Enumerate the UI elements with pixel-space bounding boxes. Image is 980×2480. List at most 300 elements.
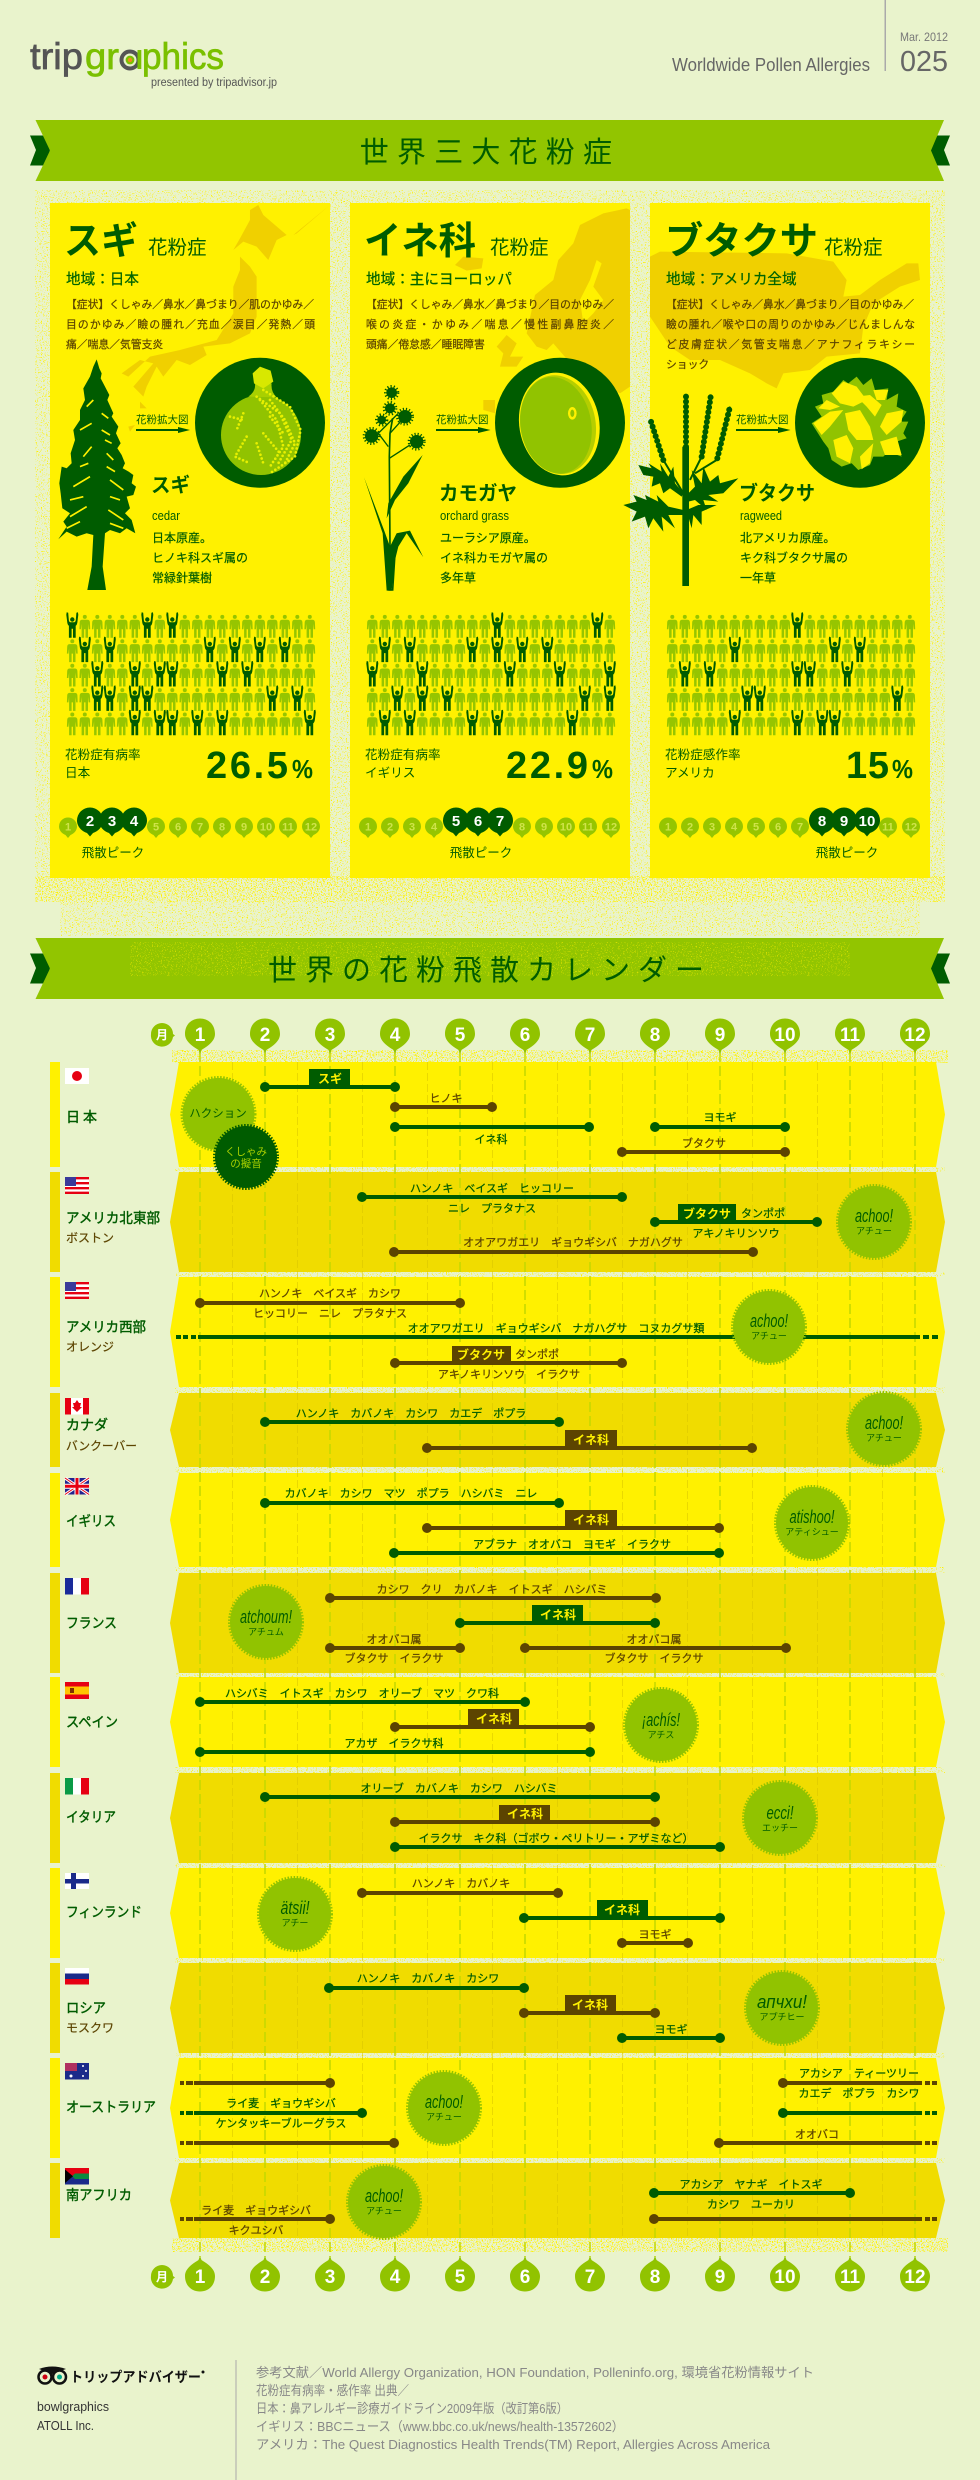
header title and issue number — [672, 0, 948, 78]
month pins: peak 2–4: 5 — [153, 822, 159, 834]
row: 日本 — [65, 1068, 790, 1188]
bar: ハンノキ カバノキ カシワ: ハンノキ カバノキ カシワ — [357, 1972, 499, 1985]
burst: achoo!: アチュー — [366, 2206, 402, 2216]
month axis: top: 7 — [585, 1025, 595, 1046]
bar: カバノキ カシワ マツ ポプラ ハシバミ ニレ — [260, 1487, 564, 1508]
month axis: bottom — [151, 2256, 930, 2292]
pictogram: 15 of 100 people — [667, 612, 915, 735]
arrow: 花粉拡大図 — [136, 413, 190, 433]
stat: 26.5%: % — [292, 754, 313, 784]
month pins: peak 5–7: 6 — [474, 813, 482, 830]
burst: achoo!: achoo! — [750, 1311, 788, 1331]
bar: アカシア ティーツリー — [778, 2067, 937, 2088]
bar: アカザ イラクサ科 — [195, 1736, 595, 1757]
month axis: bottom: 4 — [390, 2267, 401, 2288]
month pins: peak 8–10 — [659, 808, 920, 860]
month pins: peak 5–7: 5 — [452, 813, 460, 830]
month axis: bottom: 5 — [455, 2267, 466, 2288]
header logo: presented by tripadvisor.jp — [151, 77, 277, 89]
icon: ragweed pollen circle — [795, 358, 925, 488]
row: オーストラリア: オーストラリア — [66, 2099, 156, 2115]
arrow: 花粉拡大図: 花粉拡大図 — [436, 413, 488, 426]
stat: 26.5%: 26.5 — [206, 745, 288, 787]
burst: atchoum!: アチュム — [248, 1627, 284, 1637]
description: ヒノキ科スギ属の — [152, 551, 248, 565]
bar: イネ科: イネ科 — [540, 1607, 576, 1622]
map: USA — [650, 252, 920, 388]
banner: 世界の花粉飛散カレンダー: 世界の花粉飛散カレンダー — [268, 954, 712, 987]
description: 北アメリカ原産。 — [740, 531, 835, 545]
footer references — [236, 2360, 814, 2480]
bar: イネ科: イネ科 — [507, 1806, 543, 1821]
symptoms — [666, 297, 915, 371]
description: 多年草 — [440, 571, 476, 585]
month pins: peak 5–7: 8 — [519, 822, 525, 834]
month axis: bottom: 7 — [585, 2267, 595, 2288]
bar: ハンノキ ベイスギ カシワ ヒッコリー ニレ プラタナス: ハンノキ ベイスギ カシワ — [259, 1287, 401, 1300]
header title and issue number: Mar. 2012 — [900, 30, 948, 44]
symptoms: 喉の炎症・かゆみ／喘息／慢性副鼻腔炎／ — [366, 317, 614, 331]
month pins: peak 8–10: 5 — [753, 822, 759, 834]
burst: achoo!: achoo! — [425, 2092, 463, 2112]
bar: ライ麦 ギョウギシバ ケンタッキーブルーグラス: ライ麦 ギョウギシバ — [226, 2097, 336, 2110]
footer credits: ATOLL Inc. — [37, 2418, 94, 2433]
bar: ヨモギ: ヨモギ — [638, 1928, 672, 1941]
row: 南アフリカ: 南アフリカ — [66, 2187, 132, 2203]
panel: ブタクサ: 地域：アメリカ全域 — [666, 271, 797, 288]
bar: カシワ クリ カバノキ イトスギ ハシバミ — [325, 1583, 661, 1603]
flag: UK — [65, 1478, 89, 1494]
bar: アブラナ オオバコ ヨモギ イラクサ — [389, 1537, 724, 1558]
bar: ライ麦 ギョウギシバ ケンタッキーブルーグラス — [180, 2097, 367, 2130]
row: フランス — [65, 1578, 791, 1665]
month pins: peak 8–10: 6 — [775, 822, 781, 834]
burst: ハクション: ハクション — [189, 1107, 247, 1120]
burst: achoo!: アチュー — [426, 2112, 462, 2122]
month axis: bottom: 8 — [650, 2267, 660, 2288]
burst: achoo! — [348, 2166, 420, 2238]
stat: 26.5%: 花粉症有病率 — [65, 747, 141, 762]
stat: 26.5% — [65, 745, 313, 787]
stat: 22.9%: 22.9 — [506, 745, 588, 787]
row: アメリカ北東部: ボストン — [66, 1231, 114, 1245]
bar: ヨモギ — [617, 2023, 725, 2043]
bar: カバノキ カシワ マツ ポプラ ハシバミ ニレ: カバノキ カシワ マツ ポプラ ハシバミ ニレ — [285, 1487, 537, 1500]
panel: イネ科: 花粉症 — [490, 237, 549, 259]
month pins: peak 5–7: 飛散ピーク — [450, 845, 512, 860]
bar: ブタクサ タンポポ アキノキリンソウ イラクサ: ブタクサ — [457, 1347, 505, 1362]
icon: cedar pollen circle — [195, 358, 325, 488]
month pins: peak 2–4: 7 — [197, 822, 203, 834]
bar: オオバコ属 ブタクサ イラクサ (summer): ブタクサ イラクサ — [604, 1651, 704, 1665]
description: 一年草 — [740, 571, 776, 585]
bar: brown to year end — [649, 2214, 937, 2224]
month pins: peak 8–10: 7 — [797, 822, 803, 834]
bar: イネ科: イネ科 — [474, 1132, 508, 1146]
bar: アカシア ヤナギ イトスギ: カシワ ユーカリ — [707, 2198, 795, 2211]
burst: くしゃみの擬音: くしゃみ — [225, 1146, 267, 1158]
stat: 22.9%: イギリス — [365, 766, 415, 780]
description: ユーラシア原産。 — [440, 531, 536, 545]
flag: Australia — [65, 2063, 89, 2080]
month pins: peak 5–7: 4 — [431, 822, 438, 834]
month axis: top: 12 — [904, 1025, 926, 1046]
footer references: アメリカ：The Quest Diagnostics Health Trends(TM) Report, Allergies Across America — [256, 2437, 771, 2452]
bar: ハンノキ ベイスギ カシワ ヒッコリー ニレ プラタナス — [195, 1287, 465, 1320]
bar: アブラナ オオバコ ヨモギ イラクサ: アブラナ オオバコ ヨモギ イラクサ — [473, 1537, 671, 1551]
panel: ブタクサ — [623, 203, 930, 878]
bar: ライ麦 ギョウギシバ ケンタッキーブルーグラス: ケンタッキーブルーグラス — [216, 2116, 346, 2130]
month axis: top: 10 — [774, 1025, 796, 1046]
symptoms: ショック — [666, 358, 709, 371]
banner: 世界の花粉飛散カレンダー — [30, 938, 950, 999]
arrow: 花粉拡大図: 花粉拡大図 — [736, 413, 788, 426]
bar: カエデ ポプラ カシワ — [778, 2086, 937, 2118]
burst: achoo!: achoo! — [365, 2186, 403, 2206]
bar: ライ麦 ギョウギシバ キクユシバ: キクユシバ — [229, 2224, 283, 2237]
month axis: top: 6 — [520, 1025, 530, 1046]
bar: イネ科 — [519, 1900, 725, 1923]
month pins: peak 5–7: 12 — [605, 822, 617, 834]
row: 日本: 日本 — [66, 1109, 100, 1125]
bar: オオバコ属 ブタクサ イラクサ (spring): ブタクサ イラクサ — [344, 1651, 444, 1665]
bar: ヨモギ — [617, 1928, 693, 1948]
burst: くしゃみの擬音 — [215, 1126, 277, 1188]
footer references: イギリス：BBCニュース（www.bbc.co.uk/news/health-13572602） — [256, 2419, 624, 2434]
month pins: peak 5–7: 2 — [387, 822, 393, 834]
row: カナダ — [65, 1393, 920, 1465]
burst: ¡achís! — [625, 1689, 697, 1761]
symptoms: ど皮膚症状／気管支喘息／アナフィラキシー — [666, 337, 915, 351]
bar: ハシバミ イトスギ カシワ オリーブ マツ クワ科: ハシバミ イトスギ カシワ オリーブ マツ クワ科 — [225, 1686, 499, 1700]
bar: ヒノキ: ヒノキ — [430, 1092, 462, 1105]
month axis: bottom: 1 — [195, 2267, 206, 2288]
month axis: bottom: 9 — [715, 2267, 725, 2288]
description — [440, 531, 548, 585]
bar: オオバコ: オオバコ — [795, 2128, 839, 2141]
month pins: peak 8–10: 9 — [840, 813, 848, 830]
bar: ハンノキ ベイスギ ヒッコリー ニレ プラタナス: ニレ プラタナス — [448, 1202, 536, 1215]
bar: アカザ イラクサ科: アカザ イラクサ科 — [344, 1736, 444, 1750]
bar: ブタクサ タンポポ アキノキリンソウ: アキノキリンソウ — [692, 1227, 780, 1240]
row: イタリア: イタリア — [66, 1809, 116, 1825]
bar: イネ科: イネ科 — [573, 1512, 609, 1527]
footer credits: bowlgraphics — [37, 2399, 109, 2414]
footer references: 花粉症有病率・感作率 出典／ — [256, 2383, 409, 2398]
bar: カシワ クリ カバノキ イトスギ ハシバミ: カシワ クリ カバノキ イトスギ ハシバミ — [377, 1583, 607, 1596]
flag: USA — [65, 1282, 89, 1299]
burst: atishoo!: アティシュー — [785, 1527, 839, 1537]
bar: ライ麦 ギョウギシバ キクユシバ — [180, 2204, 335, 2237]
row: アメリカ北東部 — [65, 1177, 910, 1258]
bar: オオバコ属 ブタクサ イラクサ (spring) — [325, 1633, 465, 1665]
month axis: top: 月 — [156, 1028, 168, 1042]
burst: achoo!: アチュー — [751, 1331, 787, 1341]
stat: 15%: 花粉症感作率 — [665, 747, 741, 762]
symptoms: 頭痛／倦怠感／睡眠障害 — [366, 337, 485, 351]
row: アメリカ西部: オレンジ — [66, 1340, 114, 1354]
month axis: bottom: 12 — [904, 2267, 926, 2288]
row: ロシア: ロシア — [66, 2000, 106, 2016]
month axis: bottom: 6 — [520, 2267, 530, 2288]
bar: イネ科: イネ科 — [476, 1711, 512, 1726]
flag: Russia — [65, 1968, 89, 1984]
panel: ブタクサ: ブタクサ — [665, 220, 818, 263]
icon: orchard grass — [364, 387, 423, 591]
pictogram: 26.5 of 100 people — [66, 612, 316, 735]
bar: イネ科 — [390, 1805, 660, 1827]
bar: アカシア ティーツリー: アカシア ティーツリー — [799, 2067, 919, 2080]
header title and issue number: 025 — [900, 46, 948, 78]
symptoms: 【症状】くしゃみ／鼻水／鼻づまり／肌のかゆみ／ — [66, 297, 314, 311]
stat: 15%: アメリカ — [665, 766, 715, 780]
row: フィンランド — [65, 1873, 725, 1950]
footer logo: トリップアドバイザー: トリップアドバイザー — [70, 2369, 201, 2385]
banner: 世界三大花粉症 — [30, 120, 950, 181]
symptoms: 【症状】くしゃみ／鼻水／鼻づまり／目のかゆみ／ — [666, 297, 914, 311]
bar: アカシア ヤナギ イトスギ: アカシア ヤナギ イトスギ — [680, 2178, 822, 2191]
bar: イネ科 — [422, 1510, 724, 1533]
icon: ragweed — [623, 395, 738, 586]
month pins: peak 8–10: 飛散ピーク — [816, 845, 878, 860]
month pins: peak 5–7 — [359, 808, 620, 860]
burst: ¡achís!: ¡achís! — [642, 1710, 680, 1730]
arrow: 花粉拡大図 — [436, 413, 490, 433]
month axis: top: 8 — [650, 1025, 660, 1046]
month axis: top: 1 — [195, 1025, 206, 1046]
bar: ブタクサ — [617, 1136, 790, 1157]
row: フィンランド: フィンランド — [66, 1904, 142, 1920]
stat: 26.5%: 日本 — [65, 766, 91, 780]
month pins: peak 5–7: 3 — [409, 822, 415, 834]
panel: ブタクサ: 花粉症 — [824, 237, 883, 259]
symptoms — [366, 297, 614, 351]
bar: ハンノキ カバノキ カシワ カエデ ポプラ: ハンノキ カバノキ カシワ カエデ ポプラ — [296, 1406, 526, 1420]
month axis: top: 3 — [325, 1025, 335, 1046]
month pins: peak 8–10: 1 — [665, 822, 671, 834]
month pins: peak 2–4: 8 — [219, 822, 225, 834]
month axis: top: 9 — [715, 1025, 725, 1046]
bar: ハンノキ ベイスギ カシワ ヒッコリー ニレ プラタナス: ヒッコリー ニレ プラタナス — [253, 1307, 407, 1320]
stat: 15%: 15 — [846, 745, 889, 787]
flag: Japan — [65, 1068, 89, 1084]
month pins: peak 2–4: 2 — [86, 813, 94, 830]
bar: イラクサ キク科: イラクサ キク科（ゴボウ・ペリトリー・アザミなど） — [418, 1831, 694, 1845]
burst: achoo! — [408, 2072, 480, 2144]
bar: ブタクサ: ブタクサ — [682, 1136, 726, 1150]
panel: イネ科 — [350, 203, 630, 878]
bar: オオバコ — [714, 2128, 937, 2148]
burst: atishoo! — [776, 1487, 848, 1559]
symptoms — [66, 297, 315, 351]
bar: ブタクサ タンポポ アキノキリンソウ イラクサ — [390, 1346, 627, 1381]
row: フランス: フランス — [66, 1615, 117, 1631]
bar: イネ科 — [519, 1995, 660, 2018]
stat: 15%: % — [892, 754, 913, 784]
calendar bands — [50, 1062, 945, 2238]
month pins: peak 5–7: 11 — [582, 822, 594, 834]
month axis: top: 4 — [390, 1025, 401, 1046]
burst: achoo! — [733, 1291, 805, 1363]
month pins: peak 5–7: 1 — [365, 822, 371, 834]
bar: スギ — [260, 1069, 400, 1092]
month pins: peak 5–7: 10 — [560, 822, 572, 834]
bar: ハンノキ カバノキ: ハンノキ カバノキ — [412, 1877, 510, 1890]
month pins: peak 2–4: 飛散ピーク — [82, 845, 144, 860]
month pins: peak 2–4: 9 — [241, 822, 247, 834]
month axis: bottom: 3 — [325, 2267, 335, 2288]
bar: ヒノキ — [390, 1092, 497, 1112]
description: 常緑針葉樹 — [152, 570, 212, 585]
month pins: peak 2–4: 11 — [282, 822, 294, 834]
bar: オリーブ カバノキ カシワ ハシバミ: オリーブ カバノキ カシワ ハシバミ — [360, 1781, 558, 1795]
month pins: peak 2–4: 12 — [305, 822, 317, 834]
flag: Italy — [65, 1778, 89, 1794]
burst: くしゃみの擬音: の擬音 — [230, 1157, 262, 1170]
burst: achoo!: アチュー — [866, 1433, 902, 1443]
panel: スギ: スギ — [64, 221, 138, 263]
panel: ブタクサ: ragweed — [740, 508, 782, 523]
month pins: peak 2–4: 10 — [260, 822, 272, 834]
bar: ハンノキ ベイスギ ヒッコリー ニレ プラタナス: ハンノキ ベイスギ ヒッコリー — [410, 1182, 574, 1195]
bar: オオバコ属 ブタクサ イラクサ (summer) — [520, 1633, 791, 1665]
bar: イネ科 — [422, 1430, 757, 1453]
row: スペイン: スペイン — [66, 1714, 118, 1730]
row: イギリス: イギリス — [66, 1513, 116, 1529]
burst: achoo!: アチュー — [856, 1226, 892, 1236]
bar: イネ科: イネ科 — [572, 1997, 608, 2012]
panel: イネ科: カモガヤ — [439, 482, 517, 505]
bar: カエデ ポプラ カシワ: カエデ ポプラ カシワ — [798, 2086, 920, 2100]
stat: 22.9%: % — [592, 754, 613, 784]
panel: スギ: スギ — [151, 474, 190, 497]
burst: atishoo!: atishoo! — [790, 1507, 834, 1527]
bar: イラクサ キク科 — [390, 1831, 725, 1852]
bar: ブタクサ タンポポ アキノキリンソウ: ブタクサ — [683, 1206, 731, 1221]
bar: オリーブ カバノキ カシワ ハシバミ — [260, 1781, 660, 1802]
bar: ブタクサ タンポポ アキノキリンソウ: タンポポ — [741, 1207, 785, 1220]
symptoms: 痛／喘息／気管支炎 — [66, 337, 163, 351]
row: スペイン — [65, 1682, 697, 1761]
panel: イネ科: イネ科 — [364, 221, 476, 263]
bar: イネ科 — [455, 1605, 660, 1628]
burst: апчхи!: アプチヒー — [759, 2012, 805, 2022]
description — [740, 531, 848, 585]
month pins: peak 2–4: 1 — [65, 822, 71, 834]
description — [152, 531, 248, 585]
month pins: peak 5–7: 7 — [496, 813, 504, 830]
bar: オオアワガエリ ギョウギシバ ナガハグサ コヌカグサ類: オオアワガエリ ギョウギシバ ナガハグサ コヌカグサ類 — [408, 1321, 704, 1335]
burst: ecci!: エッチー — [762, 1823, 798, 1833]
panel: イネ科: orchard grass — [440, 508, 509, 523]
panel: イネ科: 地域：主にヨーロッパ — [366, 271, 512, 288]
panel: ブタクサ: ブタクサ — [739, 481, 815, 505]
bar: ハシバミ イトスギ カシワ オリーブ マツ クワ科 — [195, 1686, 530, 1707]
stat: 22.9% — [365, 745, 613, 787]
description: イネ科カモガヤ属の — [440, 551, 548, 565]
bar: ハンノキ ベイスギ ヒッコリー ニレ プラタナス — [357, 1182, 627, 1215]
flag: Canada — [65, 1398, 89, 1414]
symptoms: 【症状】くしゃみ／鼻水／鼻づまり／目のかゆみ／ — [366, 297, 614, 311]
month axis: top: 2 — [260, 1025, 270, 1046]
row: アメリカ西部 — [65, 1282, 938, 1381]
icon: cedar tree — [58, 359, 136, 590]
bar: ブタクサ タンポポ アキノキリンソウ イラクサ: タンポポ — [515, 1348, 559, 1361]
symptoms: 目のかゆみ／瞼の腫れ／充血／涙目／発熱／頭 — [66, 317, 315, 331]
bar: ライ麦 ギョウギシバ キクユシバ: ライ麦 ギョウギシバ — [201, 2204, 311, 2217]
bar: ハンノキ カバノキ カシワ カエデ ポプラ — [260, 1406, 564, 1427]
month pins: peak 8–10: 4 — [731, 822, 738, 834]
map: Europe — [455, 208, 630, 413]
bar: ブタクサ タンポポ アキノキリンソウ イラクサ: アキノキリンソウ イラクサ — [438, 1368, 580, 1381]
panel: スギ: cedar — [152, 508, 181, 523]
month axis: top: 5 — [455, 1025, 466, 1046]
month axis: top — [151, 1018, 930, 1054]
map: Japan — [122, 205, 330, 432]
pictogram: 22.9 of 100 people — [366, 612, 616, 735]
bar: ハンノキ カバノキ カシワ — [324, 1972, 529, 1993]
bar: ヨモギ: ヨモギ — [654, 2023, 688, 2036]
row: 南アフリカ — [65, 2166, 937, 2238]
footer credits — [37, 2399, 109, 2433]
row: アメリカ北東部: アメリカ北東部 — [66, 1210, 160, 1226]
panel: スギ: 花粉症 — [148, 237, 207, 259]
bar: イネ科: イネ科 — [573, 1432, 609, 1447]
month pins: peak 8–10: 3 — [709, 822, 715, 834]
month pins: peak 2–4: 6 — [175, 822, 181, 834]
flag: Finland — [65, 1873, 89, 1889]
description: キク科ブタクサ属の — [740, 550, 848, 565]
bar: 春 brown lower — [180, 2138, 399, 2148]
burst: achoo! — [838, 1186, 910, 1258]
stat: 15% — [665, 745, 913, 787]
panel: スギ: 地域：日本 — [66, 271, 139, 288]
bar: スギ: スギ — [318, 1072, 342, 1086]
month pins: peak 8–10: 10 — [859, 813, 875, 830]
month pins: peak 2–4: 4 — [130, 813, 139, 830]
bar: イネ科: イネ科 — [604, 1902, 640, 1917]
month axis: bottom: 2 — [260, 2267, 270, 2288]
row: カナダ: カナダ — [66, 1417, 108, 1433]
panel: スギ — [50, 203, 330, 878]
row: アメリカ西部: アメリカ西部 — [66, 1319, 146, 1335]
bar: 春 brown — [180, 2078, 335, 2088]
burst: achoo! — [848, 1393, 920, 1465]
bar: ハンノキ カバノキ — [357, 1877, 563, 1898]
header logo — [30, 36, 277, 89]
footer references: 参考文献／World Allergy Organization, HON Foundation, Polleninfo.org, 環境省花粉情報サイト — [256, 2365, 814, 2380]
bar: イネ科 — [390, 1122, 594, 1146]
month axis: bottom: 10 — [774, 2267, 796, 2288]
month pins: peak 8–10: 8 — [818, 813, 826, 830]
burst: atchoum!: atchoum! — [240, 1607, 292, 1627]
burst: ハクション — [182, 1078, 254, 1150]
month pins: peak 2–4: 3 — [108, 813, 116, 830]
month pins: peak 8–10: 2 — [687, 822, 693, 834]
header title and issue number: Worldwide Pollen Allergies — [672, 55, 870, 75]
symptoms: 瞼の腫れ／喉や口の周りのかゆみ／じんましんな — [666, 317, 915, 331]
banner: 世界三大花粉症: 世界三大花粉症 — [360, 136, 620, 169]
arrow: 花粉拡大図 — [736, 413, 790, 433]
month axis: bottom: 月 — [156, 2270, 168, 2284]
header logo: gr — [85, 36, 119, 77]
flag: Spain — [65, 1682, 89, 1699]
footer logo: トリップアドバイザー — [38, 2366, 204, 2385]
icon: grass pollen circle — [495, 358, 625, 488]
month pins: peak 5–7: 9 — [541, 822, 547, 834]
month grid lines — [200, 1052, 915, 2257]
bar: ヨモギ — [650, 1111, 790, 1132]
